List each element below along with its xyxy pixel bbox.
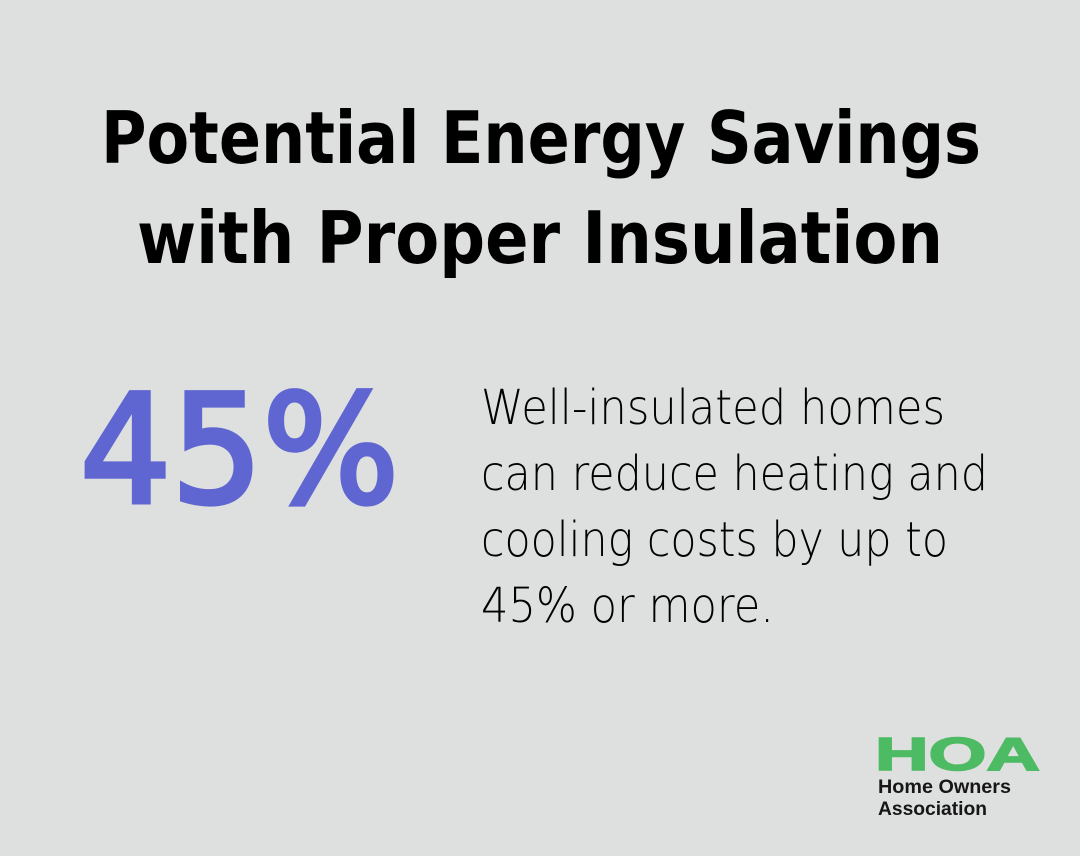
description text: cooling costs by up to [481, 512, 948, 568]
description text: Well-insulated homes [481, 380, 945, 436]
logo: HOA Home Owners Association [875, 728, 1040, 820]
description text: 45% or more. [481, 578, 774, 634]
logo: HOA Home Owners Association: Home Owners [878, 777, 1011, 798]
description text [481, 380, 988, 634]
logo: HOA Home Owners Association: Association [878, 799, 987, 820]
title [101, 96, 981, 280]
logo: HOA Home Owners Association: HOA [875, 728, 1040, 780]
description text: can reduce heating and [481, 446, 988, 502]
big statistic: 45%: 45% [80, 364, 399, 538]
title: with Proper Insulation [137, 196, 943, 280]
